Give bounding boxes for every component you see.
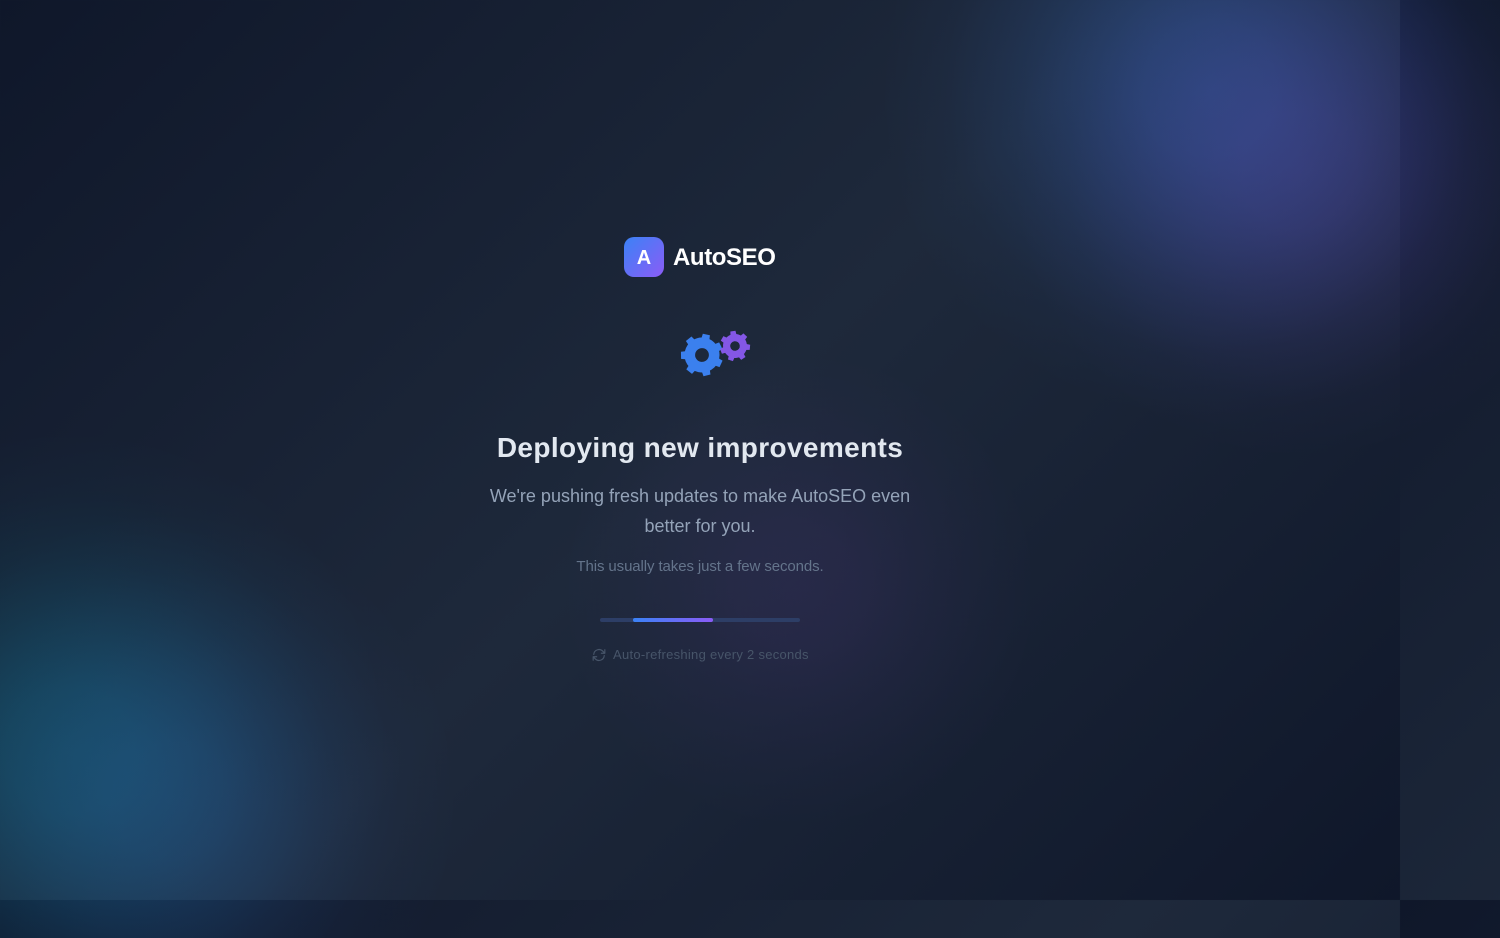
progress fill (633, 618, 713, 622)
glow: centre purple (560, 350, 1040, 830)
logo wordmark: AutoSEO (673, 244, 776, 271)
note: This usually takes just a few seconds. (576, 558, 824, 575)
progress bar (600, 618, 800, 622)
description: better for you. (644, 516, 756, 536)
heading: Deploying new improvements (497, 432, 903, 463)
logo mark (624, 237, 664, 277)
icon: blue gear (677, 330, 727, 380)
icon: gears (680, 330, 750, 376)
description: We're pushing fresh updates to make AutoSEO even (490, 486, 910, 506)
glow: top right purple (1010, 0, 1500, 460)
glow: top right blue (880, 0, 1500, 420)
logo mark: A (637, 247, 651, 269)
logo (624, 237, 776, 277)
glow: bottom left blue (0, 510, 460, 938)
icon: refresh (592, 648, 606, 662)
glow: bottom left cyan (0, 430, 390, 938)
description (490, 486, 910, 536)
refresh status (592, 647, 809, 662)
status text: Auto-refreshing every 2 seconds (613, 647, 809, 662)
icon: purple gear (718, 329, 752, 363)
